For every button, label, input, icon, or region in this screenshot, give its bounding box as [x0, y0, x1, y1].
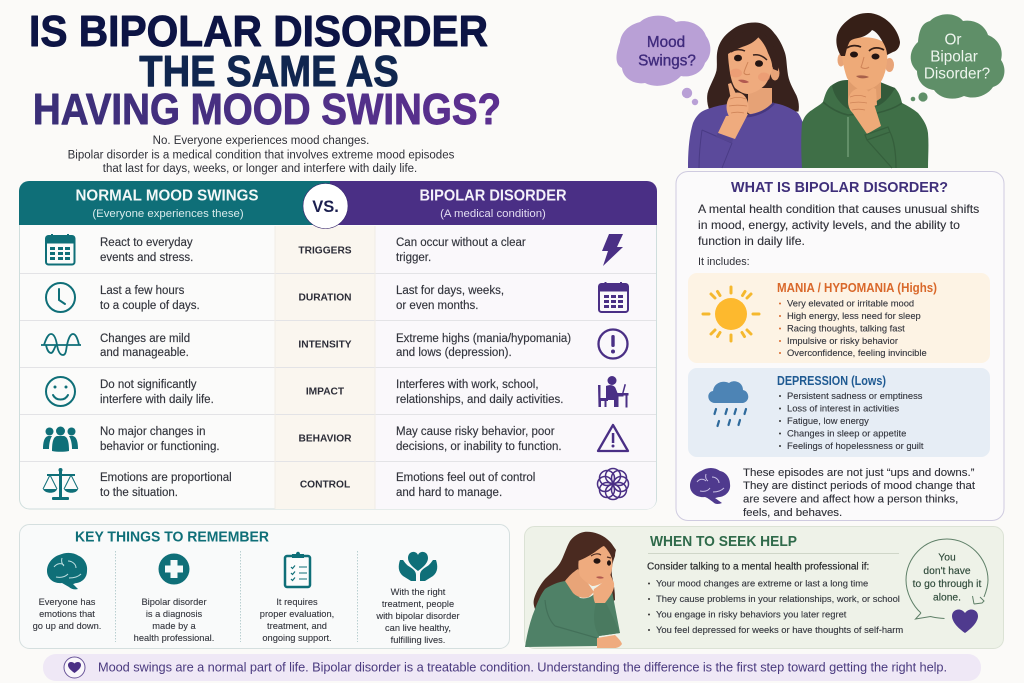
row: triggers: React to everyday [100, 237, 193, 249]
versus badge [303, 184, 348, 228]
intro text: No. Everyone experiences mood changes. [153, 135, 369, 147]
row: intensity: and manageable. [100, 347, 189, 359]
item: evaluation [260, 552, 334, 643]
item: diagnosis: made by a [152, 621, 197, 631]
card: depression: Changes in sleep or appetite [787, 428, 906, 438]
card: depression: Fatigue, low energy [787, 415, 869, 426]
title: HAVING MOOD SWINGS? [33, 85, 501, 134]
item: hope: treatment, people [382, 599, 454, 609]
row: triggers [46, 234, 623, 266]
card: mania: Very elevated or irritable mood [787, 298, 914, 308]
row: behavior: decisions, or inability to function. [396, 441, 562, 453]
icon: person at desk [598, 376, 628, 408]
thought bubble: or bipolar disorder: Bipolar [930, 48, 978, 66]
row: impact: Interferes with work, school, [396, 379, 539, 391]
card: mania: Impulsive or risky behavior [787, 335, 898, 346]
row: control [43, 468, 628, 500]
icon: wave [41, 334, 81, 355]
definition text: A mental health condition that causes unusual shifts [698, 202, 979, 216]
panel: what is bipolar disorder: WHAT IS BIPOLAR DISORDER? [731, 179, 948, 196]
right table header: (A medical condition) [440, 208, 546, 220]
row: impact: interfere with daily life. [100, 394, 214, 406]
thought bubble: or bipolar disorder: Or [944, 32, 962, 48]
intro text: that last for days, weeks, or longer and interfere with daily life. [103, 163, 417, 175]
item: hope: fulfilling lives. [391, 635, 445, 645]
row: control: Emotions feel out of control [396, 472, 535, 484]
speech bubble [906, 539, 988, 619]
speech bubble: You [938, 552, 956, 564]
icon: tangled circles [598, 468, 628, 500]
footer banner [43, 654, 981, 681]
icon: exclamation circle [598, 330, 628, 358]
intro text: Bipolar disorder is a medical condition that involves extreme mood episodes [68, 150, 455, 162]
panel: when to seek help: WHEN TO SEEK HELP [650, 533, 797, 550]
title [29, 7, 501, 134]
panel: what is bipolar disorder [676, 172, 1004, 520]
man thinking [801, 13, 928, 168]
card: depression: Feelings of hopelessness or guilt [787, 440, 924, 451]
thought bubble: or bipolar disorder: Disorder? [924, 66, 990, 82]
row: duration: DURATION [298, 292, 352, 304]
footer banner: Mood swings are a normal part of life. Bipolar disorder is a treatable condition. Understanding the difference is the first step toward getting the right help. [98, 660, 947, 674]
row: triggers: TRIGGERS [298, 246, 352, 256]
item: evaluation: proper evaluation, [260, 609, 334, 619]
icon: lightning bolt [602, 234, 623, 266]
row: duration: Last a few hours [100, 285, 185, 297]
speech bubble: don't have [923, 566, 971, 577]
card: depression [688, 368, 990, 457]
illustration: two people thinking [616, 13, 1004, 168]
row: behavior: behavior or functioning. [100, 441, 220, 453]
closing text: These episodes are not just “ups and downs.” [743, 467, 975, 479]
left table header: NORMAL MOOD SWINGS [76, 188, 258, 204]
closing text: They are distinct periods of mood change that [743, 480, 976, 492]
item: hope [375, 552, 460, 645]
panel: when to seek help [524, 526, 1004, 648]
row: behavior: May cause risky behavior, poor [396, 426, 555, 438]
thought bubble: mood swings [616, 16, 710, 105]
help criteria list: Consider talking to a mental health professional if: [647, 562, 869, 572]
item: hope: With the right [391, 587, 446, 597]
closing text: feels, and behaves. [743, 507, 842, 519]
item: diagnosis: Bipolar disorder [141, 597, 207, 607]
closing text [743, 467, 976, 519]
right table header [330, 181, 657, 225]
row: triggers: trigger. [396, 252, 431, 264]
row: control: and hard to manage. [396, 487, 502, 499]
item: diagnosis: health professional. [134, 633, 214, 643]
row: intensity: and lows (depression). [396, 347, 512, 359]
row: intensity: INTENSITY [298, 340, 352, 350]
item: hope: with bipolar disorder [375, 611, 460, 621]
woman thinking [688, 22, 807, 168]
row: control: to the situation. [100, 487, 178, 499]
icon: hands holding heart [399, 552, 437, 581]
definition text: in mood, energy, activity levels, and the ability to [698, 218, 960, 232]
comparison table [19, 181, 657, 509]
row: behavior: BEHAVIOR [298, 434, 352, 444]
panel: key things to remember: KEY THINGS TO REMEMBER [75, 530, 269, 546]
row: control: Emotions are proportional [100, 472, 232, 484]
card: depression: DEPRESSION (Lows) [777, 374, 886, 388]
row: duration: to a couple of days. [100, 300, 200, 312]
row: duration: or even months. [396, 300, 478, 312]
panel: key things to remember [20, 524, 510, 648]
row: control: CONTROL [300, 480, 350, 490]
definition text: function in daily life. [698, 234, 805, 248]
icon: purple heart [952, 609, 978, 633]
icon: teal calendar [46, 234, 74, 264]
row: intensity: Extreme highs (mania/hypomania) [396, 333, 571, 345]
row: impact: relationships, and daily activities. [396, 394, 563, 406]
right table header: BIPOLAR DISORDER [420, 188, 566, 204]
item: evaluation: treatment, and [267, 621, 327, 631]
icon: clipboard [285, 552, 310, 587]
speech bubble: to go through it [913, 579, 981, 590]
card: depression: Persistent sadness or emptiness [787, 390, 923, 401]
icon: medical cross [158, 554, 190, 584]
speech bubble: alone. [933, 592, 961, 604]
row: impact [46, 376, 628, 408]
row: duration: Last for days, weeks, [396, 285, 504, 297]
card: mania: High energy, less need for sleep [787, 310, 921, 321]
definition text: It includes: [698, 256, 750, 268]
row: impact: Do not significantly [100, 379, 197, 391]
illustration: worried woman [525, 532, 622, 648]
icon: smile [46, 377, 75, 406]
help criteria list: They cause problems in your relationships, work, or school [656, 593, 900, 604]
row: behavior [43, 425, 628, 453]
help criteria list: You engage in risky behaviors you later regret [656, 608, 847, 620]
thought bubble: or bipolar disorder [911, 14, 1004, 102]
help criteria list: Your mood changes are extreme or last a long time [656, 578, 868, 588]
item: evaluation: ongoing support. [262, 633, 332, 643]
title: THE SAME AS [139, 46, 399, 96]
definition text [698, 202, 979, 268]
card: mania: MANIA / HYPOMANIA (Highs) [777, 281, 937, 295]
item: emotions: emotions that [39, 609, 95, 619]
intro text [68, 135, 455, 175]
icon: purple brain [690, 468, 730, 504]
item: emotions [33, 553, 101, 631]
icon: sun [703, 287, 759, 341]
row: triggers: events and stress. [100, 252, 193, 264]
card: mania [688, 273, 990, 363]
row: behavior: No major changes in [100, 426, 205, 438]
icon: rain cloud [708, 381, 748, 426]
card: mania: Racing thoughts, talking fast [787, 322, 905, 334]
closing text: are severe and affect how a person thinks, [743, 494, 958, 506]
row: intensity: Changes are mild [100, 333, 190, 345]
item: hope: can live healthy, [385, 623, 451, 633]
icon: people group [43, 426, 78, 452]
icon: clock [46, 283, 75, 312]
thought bubble: mood swings: Mood [647, 34, 685, 51]
versus badge: VS. [312, 198, 339, 216]
icon: purple calendar [599, 282, 628, 312]
help criteria list [647, 562, 903, 635]
icon: heart badge [64, 657, 85, 678]
icon: scales [43, 468, 78, 500]
item: emotions: go up and down. [33, 621, 101, 631]
row: triggers: Can occur without a clear [396, 237, 526, 249]
help criteria list: You feel depressed for weeks or have thoughts of self-harm [656, 624, 903, 635]
left table header: (Everyone experiences these) [92, 208, 244, 220]
card: mania: Overconfidence, feeling invincible [787, 347, 927, 358]
item: evaluation: It requires [276, 597, 318, 607]
icon: teal brain [47, 553, 87, 589]
item: diagnosis [134, 554, 214, 643]
icon: warning triangle [598, 425, 628, 451]
row: intensity [41, 330, 628, 359]
thought bubble: mood swings: Swings? [638, 52, 696, 70]
title: IS BIPOLAR DISORDER [29, 7, 488, 55]
row: duration [46, 282, 628, 312]
row: impact: IMPACT [306, 386, 345, 398]
item: emotions: Everyone has [39, 597, 96, 607]
item: diagnosis: is a diagnosis [146, 609, 203, 619]
left table header [19, 181, 330, 225]
card: depression: Loss of interest in activities [787, 402, 899, 414]
